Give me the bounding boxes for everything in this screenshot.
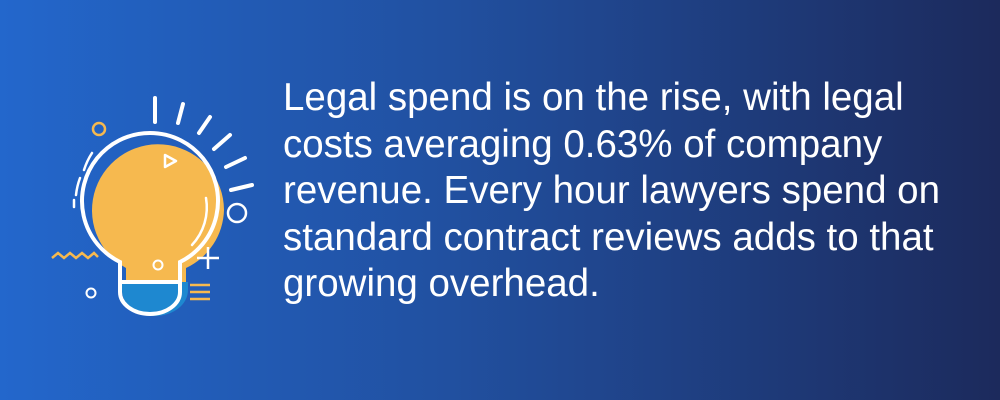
text block: growing overhead.	[283, 262, 600, 305]
bulb outline	[74, 133, 218, 314]
light rays	[155, 98, 252, 190]
bulb yellow fill	[92, 144, 224, 282]
text block: revenue. Every hour lawyers spend on	[283, 169, 940, 212]
text block: costs averaging 0.63% of company	[283, 122, 882, 166]
decorations	[52, 123, 246, 299]
text block: Legal spend is on the rise, with legal	[283, 76, 904, 119]
text block	[283, 76, 940, 305]
text block: standard contract reviews adds to that	[283, 216, 934, 258]
icon: light bulb	[51, 96, 254, 316]
bulb blue base	[122, 282, 188, 316]
